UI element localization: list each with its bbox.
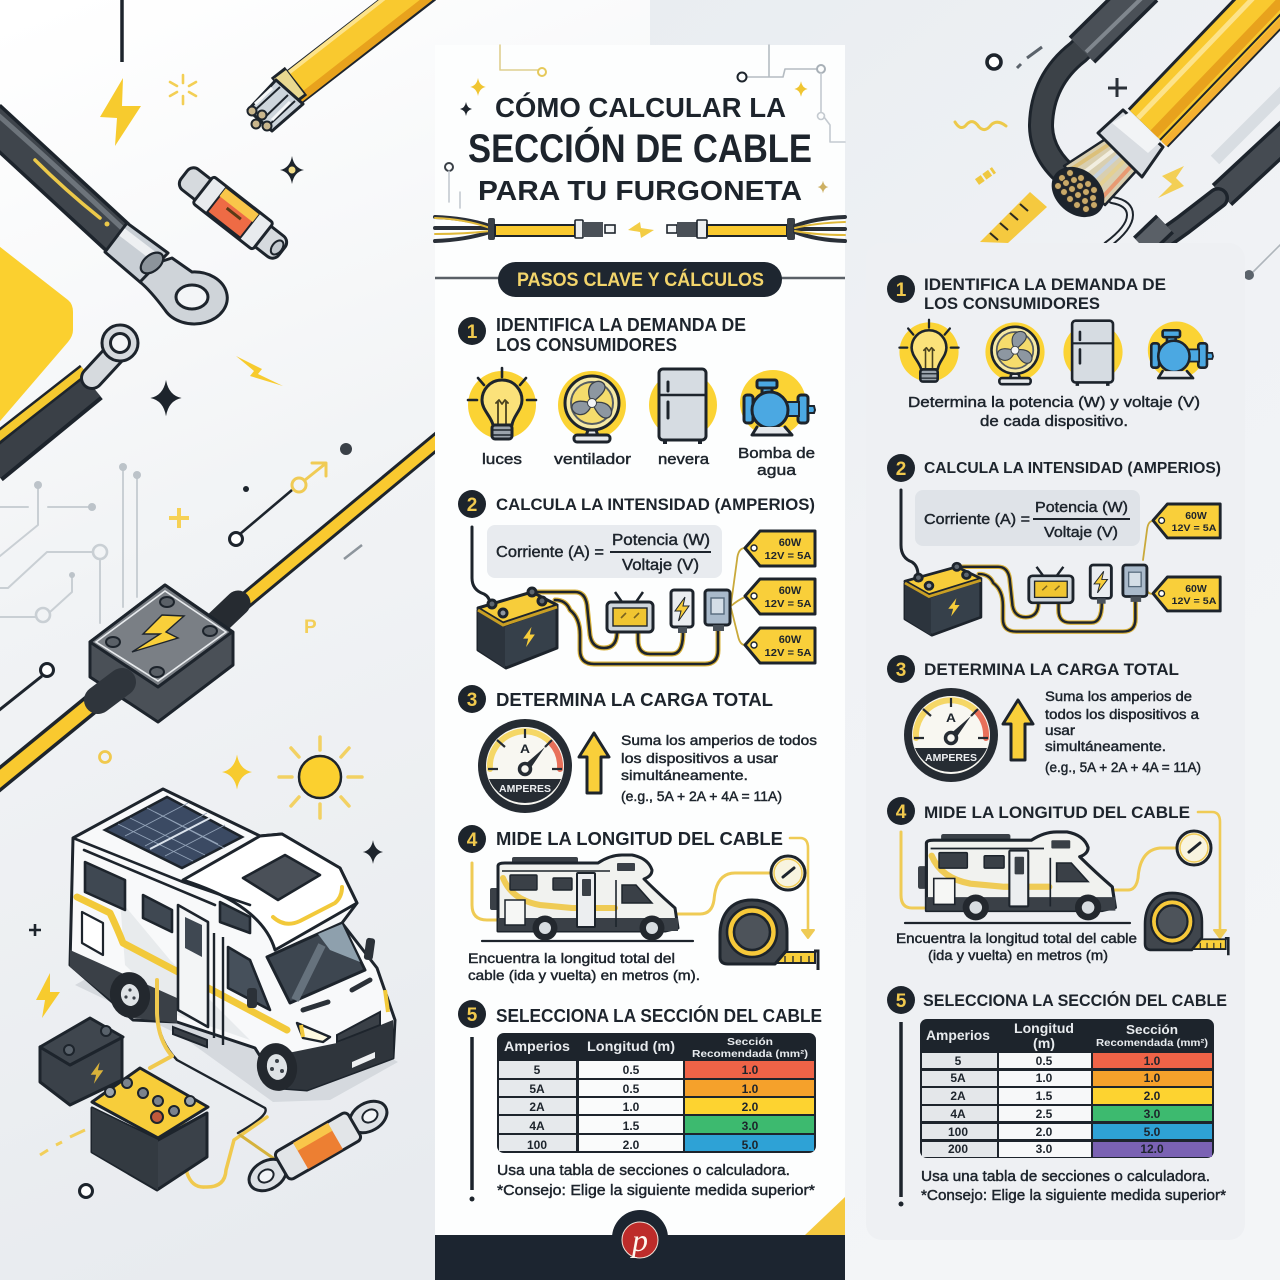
icon: black sparkle [280, 156, 304, 184]
right formula box: Potencia (W) [1035, 499, 1128, 516]
icon: fuse top left [174, 161, 292, 265]
right step number 5 [887, 986, 915, 1014]
right table: cable sections: 0.5 [1036, 1054, 1053, 1068]
table: cable sections: 0.5 [623, 1082, 640, 1096]
decoration: yellow letter mark: P [304, 617, 317, 638]
tag: 60W 1: 12V = 5A [764, 551, 812, 562]
formula box: Corriente (A) = [496, 544, 604, 561]
step number 2: 2 [467, 495, 477, 516]
right table: cable sections: 1.0 [1144, 1054, 1161, 1068]
right table: cable sections: Sección [1126, 1022, 1178, 1037]
illustration: camper side view [490, 855, 678, 940]
step number 4 [458, 825, 486, 853]
step number 3: 3 [467, 690, 477, 711]
step 1 heading: LOS CONSUMIDORES [496, 335, 677, 355]
decoration: bottom right trace [1244, 243, 1280, 280]
decoration: arrow trace [230, 443, 362, 559]
cable: yellow stripped end top [248, 0, 430, 131]
right tag 2: 12V = 5A [1172, 596, 1217, 607]
table: cable sections: 4A [529, 1119, 545, 1133]
icon: fridge [1063, 321, 1123, 386]
right table: cable sections: 200 [948, 1142, 968, 1156]
tag: 60W 2: 12V = 5A [764, 599, 812, 610]
right formula box: Corriente (A) = [924, 511, 1030, 528]
decoration: circuit traces [0, 467, 137, 623]
table: cable sections: Recomendada (mm²) [692, 1049, 808, 1060]
table: cable sections: 5A [529, 1082, 545, 1096]
panel: right infographic [866, 243, 1245, 1240]
step number 4: 4 [467, 830, 478, 851]
right formula box [915, 490, 1140, 546]
decoration: dashes and ring bottom left [40, 1130, 92, 1198]
step number 5 [458, 1000, 486, 1028]
right tag 1: 12V = 5A [1172, 523, 1217, 534]
formula box: Voltaje (V) [622, 557, 699, 574]
icon: fuse with ring terminals [242, 1093, 394, 1199]
heading pill: pasos clave: PASOS CLAVE Y CÁLCULOS [517, 269, 764, 291]
tag: 60W 2: 60W [779, 585, 802, 597]
right table: cable sections: 1.0 [1144, 1071, 1161, 1085]
step 3 text: simultáneamente. [621, 767, 748, 783]
icon: clock [771, 856, 805, 890]
right step 5 text: Usa una tabla de secciones o calculadora. [921, 1169, 1210, 1185]
tag: 60W 1 [745, 531, 815, 566]
step number 1: 1 [467, 322, 478, 343]
right icon: gauge [904, 688, 998, 782]
icon: second battery [40, 1018, 123, 1105]
table: cable sections: 5 [534, 1063, 541, 1077]
table: cable sections: 0.5 [623, 1063, 640, 1077]
right table: cable sections: 3.0 [1036, 1142, 1053, 1156]
cable: long yellow lower [0, 697, 100, 787]
cable: long yellow upper [218, 437, 442, 622]
right step 3 text: simultáneamente. [1045, 739, 1166, 754]
table: cable sections: 1.0 [742, 1063, 759, 1077]
right tag 2: 60W [1185, 583, 1207, 595]
icon: light bulb [468, 368, 536, 439]
table: cable sections: 1.0 [623, 1100, 640, 1114]
right step 1 text: de cada dispositivo. [980, 413, 1128, 430]
right table: cable sections: 5 [955, 1054, 962, 1068]
step 4 heading: MIDE LA LONGITUD DEL CABLE [496, 829, 783, 849]
right step 3 heading: DETERMINA LA CARGA TOTAL [924, 660, 1179, 679]
icon: fridge [649, 369, 717, 444]
step 4 [458, 825, 818, 983]
icon: yellow plus [169, 508, 189, 528]
icon: title sparkle tan [818, 181, 828, 193]
right step 1 heading: IDENTIFICA LA DEMANDA DE [924, 275, 1166, 294]
right step 3 text: (e.g., 5A + 2A + 4A = 11A) [1045, 760, 1201, 775]
decoration: cable banner [435, 217, 845, 241]
icon: lightning top left [100, 78, 141, 146]
icon: title sparkle black [460, 102, 472, 116]
right icon: clock [1177, 831, 1211, 865]
decoration: yellow hexagon [0, 243, 73, 427]
footer band [435, 1197, 845, 1280]
step 3 text: los dispositivos a usar [621, 750, 778, 766]
right table: cable sections: 4A [950, 1107, 966, 1121]
right step 5 [887, 986, 1227, 1206]
table: cable sections: 2.0 [623, 1138, 640, 1152]
table: cable sections: 2A [529, 1100, 545, 1114]
right step 5 heading: SELECCIONA LA SECCIÓN DEL CABLE [923, 991, 1227, 1010]
tag: 60W 3: 12V = 5A [764, 648, 812, 659]
right table: cable sections: 2.0 [1144, 1089, 1161, 1103]
step 4 text: cable (ida y vuelta) en metros (m). [468, 967, 700, 983]
step line [470, 1037, 474, 1202]
right step 5 text: *Consejo: Elige la siguiente medida superior* [921, 1188, 1226, 1204]
panel: central infographic [435, 45, 845, 1280]
right tag 1 [1153, 504, 1220, 538]
icon: yellow sparkle by sun [222, 754, 252, 790]
step 4 text: Encuentra la longitud total del [468, 950, 675, 966]
step 5 text: Usa una tabla de secciones o calculadora. [497, 1162, 790, 1179]
icon: tape measure [720, 900, 818, 970]
tag: 60W 2 [745, 579, 815, 614]
table: cable sections: 1.5 [623, 1119, 640, 1133]
decoration: left trace ring [0, 664, 54, 711]
right connector lines to tags [1143, 521, 1153, 594]
title: CÓMO CALCULAR LA [495, 92, 786, 123]
title: SECCIÓN DE CABLE [468, 125, 812, 171]
step number 5: 5 [467, 1005, 478, 1026]
right table: cable sections: Amperios [926, 1027, 990, 1043]
decoration: title circuit traces [445, 45, 845, 208]
right table: cable sections: 100 [948, 1125, 968, 1139]
icon labels: ventilador [554, 451, 631, 468]
step 2 heading: CALCULA LA INTENSIDAD (AMPERIOS) [496, 495, 815, 514]
tag: 60W 3 [745, 628, 815, 663]
icon labels: luces [482, 451, 522, 468]
icon: sun [279, 737, 362, 818]
right step number 3 [887, 655, 915, 683]
right step 3 text [1045, 689, 1201, 775]
step 5 text [497, 1162, 815, 1199]
right step 3 [887, 655, 1201, 782]
right step line [898, 1022, 904, 1206]
right step number 5: 5 [896, 991, 907, 1012]
table: cable sections: 100 [527, 1138, 547, 1152]
right table: cable sections: 5.0 [1144, 1125, 1161, 1139]
right table: cable sections: Longitud [1014, 1020, 1074, 1036]
connector lines to tags [731, 548, 745, 645]
decoration: circuit dots [34, 463, 141, 578]
formula box: Potencia (W) [612, 532, 710, 549]
right step number 1: 1 [896, 280, 907, 301]
formula box [487, 525, 722, 578]
icon: water pump [740, 370, 815, 436]
right table: cable sections: Recomendada (mm²) [1096, 1038, 1208, 1049]
right table: cable sections: 1.0 [1036, 1071, 1053, 1085]
icon: small yellow ring [100, 752, 110, 762]
right formula box: Voltaje (V) [1044, 524, 1118, 541]
icon: plus top right [1108, 78, 1127, 97]
icon: lightning outline [236, 356, 283, 386]
right step number 1 [887, 275, 915, 303]
right icon: tape measure [1145, 893, 1228, 955]
icon: light bulb [899, 320, 959, 382]
icon: black sparkle middle [150, 380, 182, 416]
table: cable sections: Amperios [504, 1038, 570, 1054]
cable: black with ring terminal [0, 108, 227, 324]
right step 5 text [921, 1169, 1226, 1204]
table: cable sections: 2.0 [742, 1100, 759, 1114]
right measuring lines [901, 812, 1226, 938]
step number 3 [458, 685, 486, 713]
step 3 text: Suma los amperios de todos [621, 732, 817, 748]
step 5 heading: SELECCIONA LA SECCIÓN DEL CABLE [496, 1005, 822, 1026]
right step 2 heading: CALCULA LA INTENSIDAD (AMPERIOS) [924, 460, 1221, 477]
illustration: camper van isometric [70, 789, 398, 1102]
icon: title sparkle yellow left [470, 78, 486, 96]
decoration: dash top right [1017, 47, 1042, 68]
icon: up arrow [579, 733, 609, 793]
icon: black plus [29, 924, 41, 936]
title: PARA TU FURGONETA [478, 175, 802, 206]
decoration: top vertical line [120, 0, 124, 62]
icon: lightning by battery [36, 973, 60, 1018]
icon: lightning right [1158, 166, 1184, 198]
table: cable sections: 1.0 [742, 1082, 759, 1096]
icon: ruler [980, 192, 1047, 243]
right decoration: cables and stripped conductor [1041, 0, 1280, 246]
icon: pinterest logo: p [630, 1222, 648, 1258]
right table: cable sections: 1.5 [1036, 1089, 1053, 1103]
right step number 2 [887, 454, 915, 482]
cable: small ring terminal [0, 325, 138, 468]
icon: yellow sparkle burst [170, 75, 196, 104]
right step 1 text [908, 394, 1200, 430]
background left and centre [0, 0, 650, 1280]
right connector line [901, 490, 918, 575]
right table: cable sections: 12.0 [1140, 1142, 1164, 1156]
icon: ring top right [987, 55, 1001, 69]
decoration: yellow zigzag [955, 122, 1006, 130]
right table: cable sections [920, 1019, 1214, 1158]
step 3 text: (e.g., 5A + 2A + 4A = 11A) [621, 788, 782, 804]
right step 4 text [896, 931, 1137, 963]
icon labels [482, 445, 815, 479]
right step 1 text: Determina la potencia (W) y voltaje (V) [908, 394, 1200, 411]
icon: fan [985, 322, 1045, 384]
measuring lines [472, 838, 814, 941]
right table: cable sections: 2.0 [1036, 1125, 1053, 1139]
background right [650, 0, 1280, 1280]
right step number 3: 3 [896, 660, 906, 681]
right camper side view [918, 832, 1115, 920]
right step 4 heading: MIDE LA LONGITUD DEL CABLE [924, 803, 1190, 822]
table: cable sections: Longitud (m) [587, 1038, 675, 1054]
right step 4 text: (ida y vuelta) en metros (m) [928, 948, 1108, 963]
step 2 [458, 490, 815, 668]
right step 3 text: todos los dispositivos a [1045, 707, 1200, 722]
icon labels: agua [757, 462, 797, 479]
icon: black sparkle by sun [363, 840, 383, 864]
connector line to battery [472, 527, 490, 605]
table: cable sections: Sección [727, 1037, 773, 1048]
icon: title sparkle yellow right [794, 81, 808, 97]
right icon: up arrow [1003, 700, 1033, 760]
right step number 4: 4 [896, 802, 907, 823]
icon: water pump [1148, 322, 1213, 379]
right step 3 text: Suma los amperios de [1045, 689, 1192, 704]
wires: solar and battery connections [150, 980, 273, 1187]
right circuit: battery and devices [905, 563, 1147, 635]
step 3 heading: DETERMINA LA CARGA TOTAL [496, 690, 773, 710]
tag: 60W 1: 60W [779, 537, 802, 549]
step 3 text [621, 732, 817, 804]
right step 2 [887, 454, 1221, 635]
right table: cable sections: 2A [950, 1089, 966, 1103]
right tag 1: 60W [1185, 510, 1207, 522]
right step 3 text: usar [1045, 723, 1076, 738]
right step 1 heading: LOS CONSUMIDORES [924, 294, 1100, 313]
step 3 [458, 685, 817, 813]
icon: junction box [90, 585, 233, 722]
divider: section rule [435, 277, 845, 279]
right step number 4 [887, 797, 915, 825]
step number 2 [458, 490, 486, 518]
table: cable sections: 5.0 [742, 1138, 759, 1152]
step 5 [458, 1000, 822, 1202]
step 1 heading: IDENTIFICA LA DEMANDA DE [496, 315, 746, 335]
step 1 heading [496, 315, 746, 355]
step number 1 [458, 317, 486, 345]
right table: cable sections: (m) [1033, 1035, 1055, 1051]
step 5 text: *Consejo: Elige la siguiente medida superior* [497, 1182, 815, 1199]
right table: cable sections: 2.5 [1036, 1107, 1053, 1121]
icon: ampere gauge [478, 719, 572, 813]
icon: pinterest logo [622, 1222, 658, 1258]
table: cable sections [497, 1033, 816, 1153]
right step number 2: 2 [896, 459, 906, 480]
right table: cable sections: 5A [950, 1071, 966, 1085]
icon labels: Bomba de [738, 445, 815, 462]
right step 1 heading [924, 275, 1166, 313]
circuit: battery and devices [478, 588, 730, 668]
icon: fan [558, 371, 626, 442]
step 4 text [468, 950, 700, 983]
icon: main battery [92, 1068, 208, 1190]
right table: cable sections: 3.0 [1144, 1107, 1161, 1121]
decoration: yellow dashes [977, 170, 994, 182]
right step 1 [887, 275, 1213, 430]
right tag 2 [1153, 577, 1220, 611]
table: cable sections: 3.0 [742, 1119, 759, 1133]
tag: 60W 3: 60W [779, 634, 802, 646]
right step 4 text: Encuentra la longitud total del cable [896, 931, 1137, 946]
icon labels: nevera [658, 451, 710, 468]
heading pill: pasos clave [498, 262, 782, 297]
title [468, 92, 812, 206]
step 1 [458, 315, 815, 479]
right step 4 [887, 797, 1228, 963]
